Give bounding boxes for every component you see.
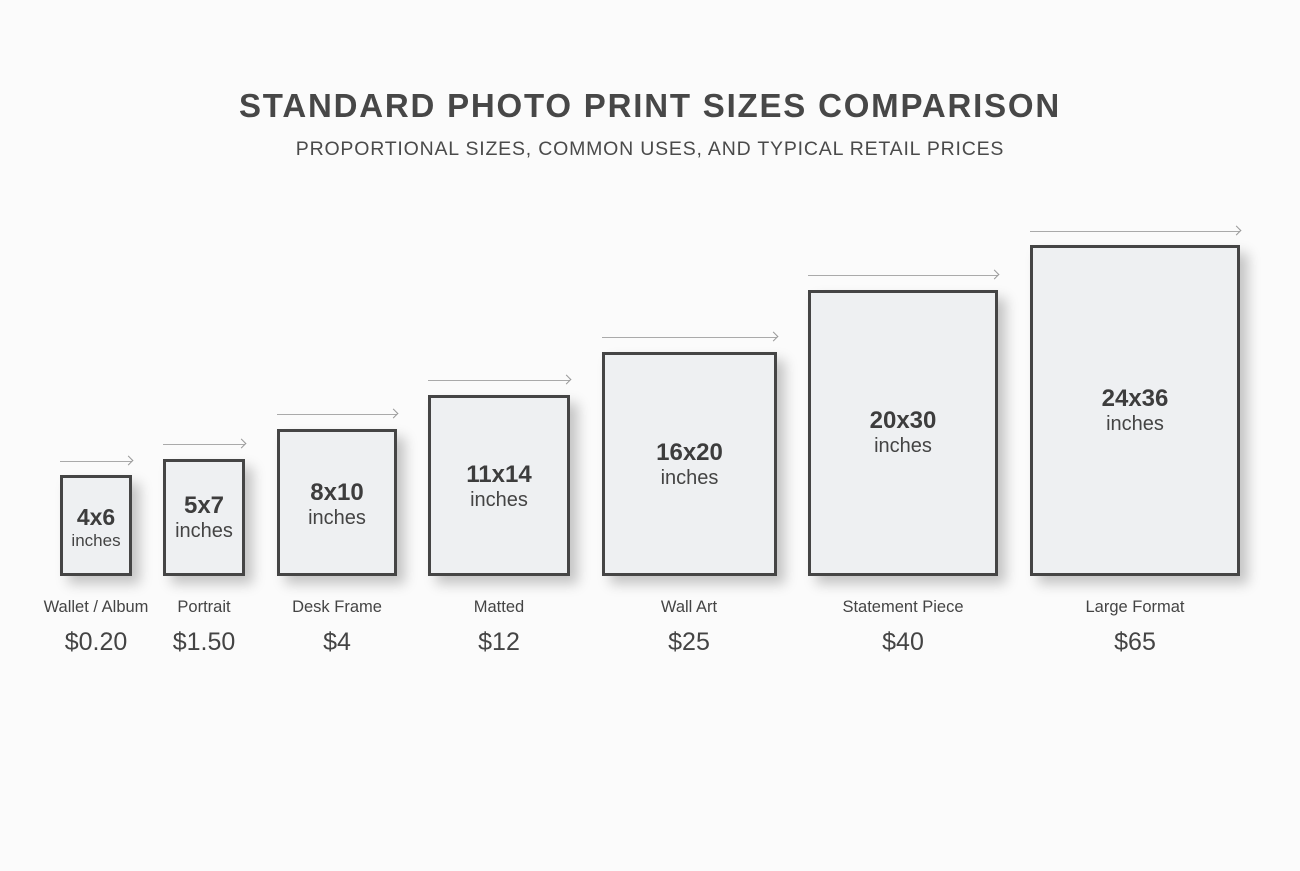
- price: $65: $65: [1114, 628, 1156, 656]
- frame: 24x36: 24x36: [1102, 385, 1168, 412]
- label: Large Format: Large Format: [1085, 598, 1185, 616]
- frame: 4x6: 4x6: [77, 504, 115, 530]
- frame: 5x7: inches: [175, 520, 233, 542]
- arrow: 24x36: [1030, 231, 1240, 232]
- title: STANDARD PHOTO PRINT SIZES COMPARISON: [239, 87, 1061, 124]
- frame: 24x36: [1030, 245, 1240, 576]
- price: $1.50: $1.50: [173, 628, 235, 656]
- subtitle: PROPORTIONAL SIZES, COMMON USES, AND TYPICAL RETAIL PRICES: [296, 138, 1004, 160]
- frame: 24x36: inches: [1106, 413, 1164, 435]
- label: Wallet / Album: Wallet / Album: [44, 598, 148, 616]
- price: $25: $25: [668, 628, 710, 656]
- frame: 8x10: 8x10: [310, 479, 364, 506]
- price: $4: $4: [323, 628, 351, 656]
- frame: 11x14: 11x14: [466, 461, 532, 488]
- arrow: 16x20: [602, 337, 777, 338]
- frame: 16x20: inches: [661, 467, 718, 489]
- frame: 20x30: [808, 290, 998, 576]
- label: Wall Art: Wall Art: [661, 598, 717, 616]
- frame: 8x10: [277, 429, 397, 576]
- price: $40: $40: [882, 628, 924, 656]
- price: $12: $12: [478, 628, 520, 656]
- frame: 16x20: 16x20: [656, 439, 723, 466]
- arrow: 20x30: [808, 275, 998, 276]
- frame: 8x10: inches: [308, 507, 366, 529]
- label: Statement Piece: Statement Piece: [842, 598, 964, 616]
- frame: 16x20: [602, 352, 777, 576]
- frame: 4x6: [60, 475, 132, 576]
- label: Desk Frame: Desk Frame: [292, 598, 382, 616]
- frame: 4x6: inches: [71, 531, 121, 550]
- arrow: 4x6: [60, 461, 132, 462]
- frame: 5x7: 5x7: [184, 492, 224, 519]
- price: $0.20: $0.20: [65, 628, 127, 656]
- frame: 11x14: [428, 395, 570, 576]
- frame: 20x30: 20x30: [870, 407, 936, 434]
- frame: 20x30: inches: [874, 435, 932, 457]
- label: Portrait: Portrait: [177, 598, 231, 616]
- arrow: 11x14: [428, 380, 570, 381]
- frame: 11x14: inches: [470, 489, 528, 511]
- arrow: 8x10: [277, 414, 397, 415]
- label: Matted: Matted: [474, 598, 524, 616]
- frame: 5x7: [163, 459, 245, 576]
- arrow: 5x7: [163, 444, 245, 445]
